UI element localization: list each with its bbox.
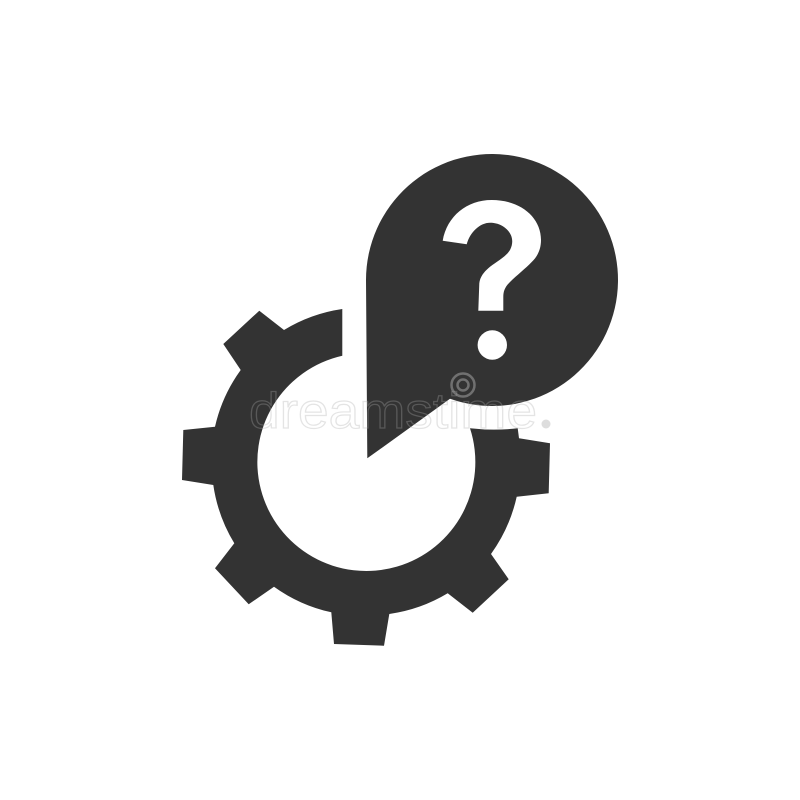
question mark dot: [478, 330, 507, 360]
watermark registered mark: [542, 420, 550, 428]
speech bubble: [366, 154, 618, 458]
watermark: [249, 374, 550, 439]
watermark spiral: [452, 374, 474, 396]
icon: speech bubble with question mark: [366, 154, 618, 458]
icon: gear: [182, 309, 550, 646]
watermark text: dreamstime: [249, 383, 537, 439]
question mark hook: [443, 200, 541, 311]
